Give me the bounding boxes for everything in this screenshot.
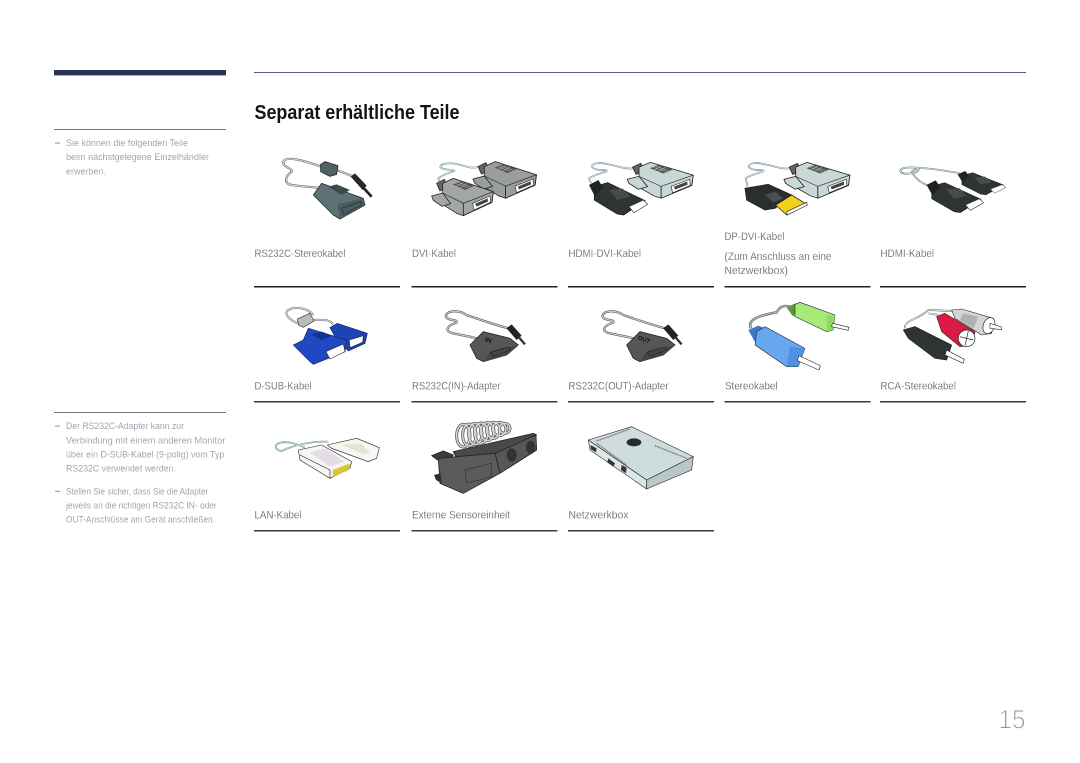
- label: HDMI-Kabel: [880, 248, 934, 260]
- icon: LAN cable: [276, 438, 379, 478]
- item: DVI-Kabel: [412, 162, 558, 288]
- sidebar note: adapter hints: Der RS232C-Adapter kann zur: [66, 421, 184, 432]
- icon: RS232C OUT adapter: [603, 311, 682, 362]
- icon: RS232C OUT adapter: OUT: [637, 336, 651, 345]
- rule: [254, 530, 400, 532]
- label: RS232C(IN)-Adapter: [412, 380, 501, 392]
- item: RS232C(IN)-Adapter: [412, 311, 558, 402]
- label: DVI-Kabel: [412, 248, 456, 260]
- sidebar note: adapter hints: Verbindung mit einem anderen Monitor: [66, 435, 225, 446]
- label: Netzwerkbox: [568, 509, 629, 521]
- page number: 15: [998, 704, 1026, 734]
- item: LAN-Kabel: [254, 438, 400, 532]
- item: Externe Sensoreinheit: [412, 422, 558, 532]
- sidebar note: adapter hints: RS232C verwendet werden.: [66, 464, 176, 475]
- rule: [412, 530, 558, 532]
- sidebar note: adapter hints: [54, 412, 226, 525]
- item: DP-DVI-Kabel: [724, 162, 870, 288]
- sidebar note: adapter hints: Stellen Sie sicher, dass Sie die Adapter: [66, 486, 208, 497]
- icon: D-SUB cable: [286, 308, 367, 364]
- label: Netzwerkbox): [724, 265, 788, 277]
- label: Externe Sensoreinheit: [412, 509, 510, 521]
- icon: network box: [588, 427, 693, 489]
- title: Separat erhältliche Teile: [254, 101, 460, 124]
- icon: HDMI-DVI cable: [589, 162, 693, 215]
- rule: [568, 530, 714, 532]
- item: RCA-Stereokabel: [880, 309, 1026, 402]
- label: HDMI-DVI-Kabel: [568, 248, 641, 260]
- item: Stereokabel: [724, 302, 870, 402]
- rule: [724, 286, 870, 288]
- item: RS232C-Stereokabel: [254, 159, 400, 288]
- icon: RS232C IN adapter: IN: [484, 336, 492, 345]
- rule: [412, 401, 558, 402]
- label: LAN-Kabel: [254, 509, 302, 521]
- item: D-SUB-Kabel: [254, 308, 400, 402]
- label: DP-DVI-Kabel: [724, 231, 784, 243]
- rule: [568, 286, 714, 288]
- rule: [568, 401, 714, 402]
- sidebar note: purchase hint: beim nächstgelegene Einzelhändler: [66, 152, 209, 163]
- rule: [724, 401, 870, 402]
- sidebar note: purchase hint: [54, 129, 226, 177]
- label: RCA-Stereokabel: [880, 380, 956, 392]
- icon: stereo cable: [748, 302, 849, 370]
- icon: DVI cable: [432, 162, 536, 216]
- icon: HDMI cable: [900, 167, 1006, 213]
- icon: external sensor unit: [432, 422, 537, 493]
- rule: [254, 286, 400, 288]
- sidebar note: adapter hints: jeweils an die richtigen RS232C IN- oder: [65, 500, 217, 511]
- sidebar note: purchase hint: erwerben.: [66, 166, 106, 177]
- rule: [412, 286, 558, 288]
- sidebar note: purchase hint: Sie können die folgenden Teile: [66, 138, 188, 149]
- label: RS232C(OUT)-Adapter: [568, 380, 669, 392]
- icon: RCA stereo cable: [903, 309, 1002, 363]
- sidebar note: adapter hints: über ein D-SUB-Kabel (9-polig) vom Typ: [66, 449, 224, 460]
- rule: [880, 401, 1026, 402]
- header bar: sidebar accent: [54, 70, 226, 75]
- icon: DP-DVI cable: [745, 162, 850, 215]
- sidebar note: adapter hints: OUT-Anschlüsse am Gerät anschließen.: [66, 514, 215, 525]
- header rule: [254, 72, 1026, 73]
- icon: RS232C IN adapter: [446, 311, 525, 362]
- rule: [880, 286, 1026, 288]
- item: Netzwerkbox: [568, 427, 714, 532]
- icon: RS232C stereo cable: [283, 159, 372, 219]
- item: RS232C(OUT)-Adapter: [568, 311, 714, 402]
- label: RS232C-Stereokabel: [254, 248, 346, 260]
- label: Stereokabel: [725, 380, 778, 392]
- label: D-SUB-Kabel: [254, 380, 312, 392]
- label: [724, 231, 832, 277]
- label: (Zum Anschluss an eine: [724, 251, 832, 263]
- rule: [254, 401, 400, 402]
- item: HDMI-Kabel: [880, 167, 1026, 288]
- item: HDMI-DVI-Kabel: [568, 162, 714, 288]
